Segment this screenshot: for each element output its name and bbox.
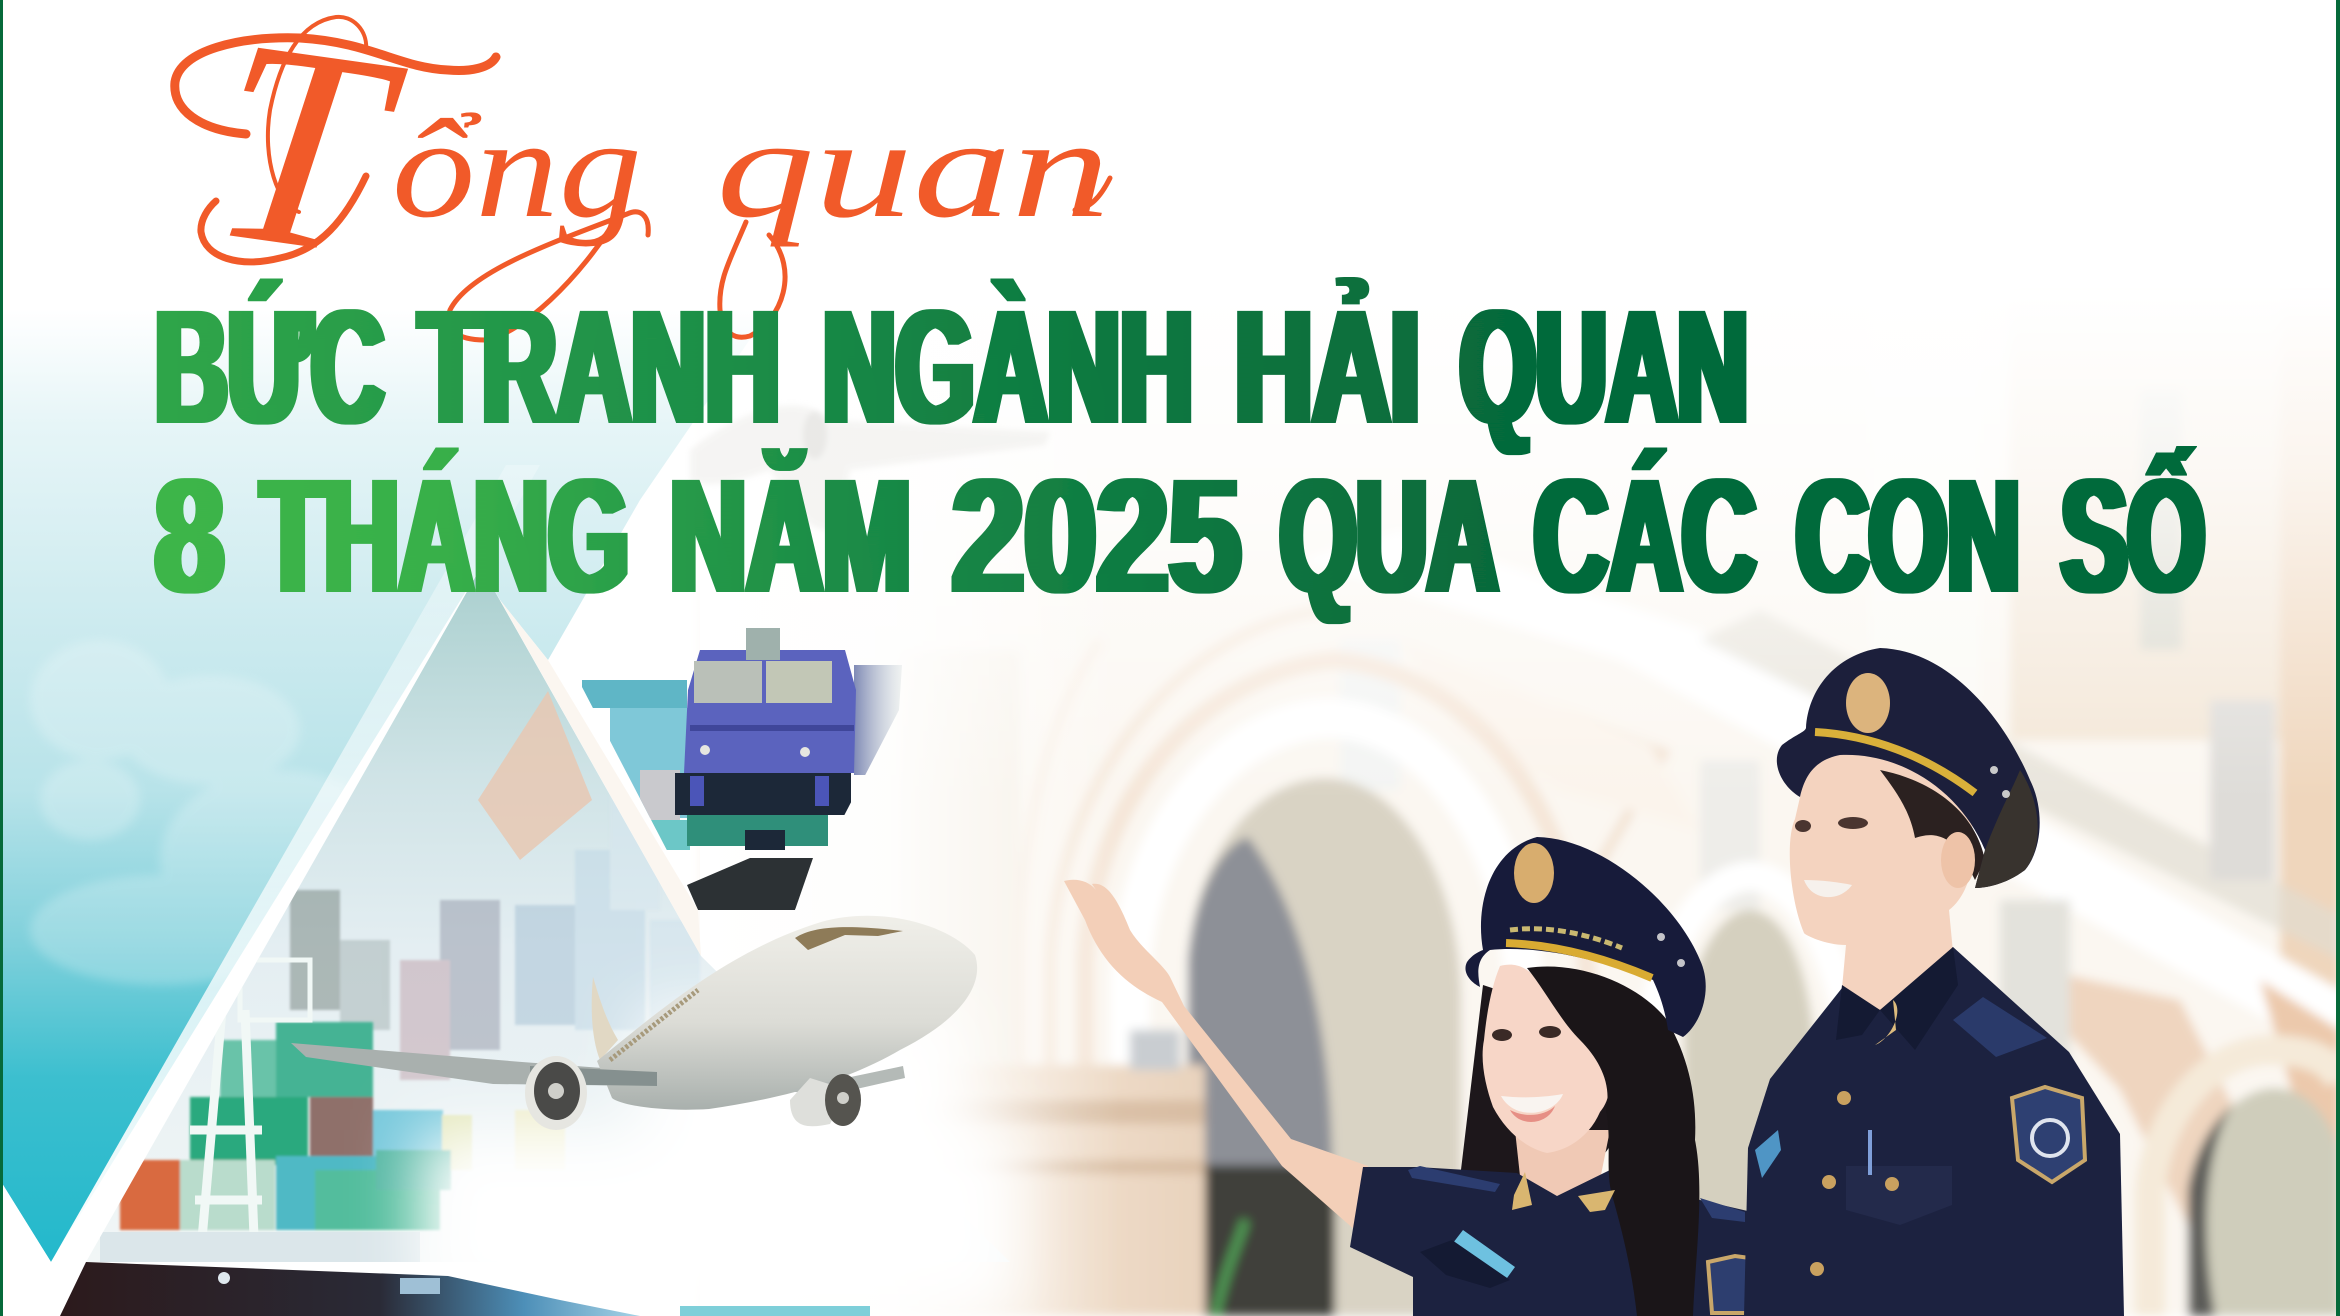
train triangle — [582, 628, 904, 910]
sleeve badge — [2012, 1087, 2085, 1182]
quay strip — [100, 1232, 420, 1264]
building background photo — [600, 290, 2340, 1316]
arch 1 moulding — [1130, 718, 1525, 1316]
shirt — [1350, 1167, 1752, 1316]
airplane — [291, 916, 977, 1130]
buttons — [1810, 1091, 1899, 1276]
neck — [1515, 1130, 1610, 1196]
locomotive side — [854, 665, 904, 775]
collar pins — [1512, 1172, 1532, 1210]
headline line 2: THÁNG — [261, 444, 629, 627]
headline line 2: CON — [1796, 444, 2020, 627]
headline line 2: NĂM — [670, 444, 911, 627]
front hair — [1527, 967, 1699, 1316]
face — [1483, 965, 1609, 1153]
ship hull — [60, 1262, 870, 1316]
script heading — [175, 0, 1110, 340]
headline line 2: SỐ — [2061, 444, 2205, 627]
headline line 2: QUA — [1280, 444, 1498, 627]
city skyline — [288, 850, 700, 1081]
headline line 1 — [155, 275, 1748, 458]
pillar — [880, 1065, 1205, 1316]
headline line 1: HẢI — [1235, 275, 1420, 458]
fog over lower middle — [420, 1010, 1020, 1316]
headline line 2: CÁC — [1534, 444, 1756, 627]
track — [687, 858, 813, 910]
name tag — [1453, 1230, 1515, 1278]
hair and ear — [1880, 770, 1985, 880]
neck and face — [1790, 745, 1974, 1010]
name tag — [1755, 1130, 1781, 1178]
heading text: ổng — [392, 89, 642, 247]
white band right of upright triangle — [500, 600, 701, 956]
eyes and smile — [1492, 1029, 1512, 1041]
customs officer: man — [1744, 648, 2124, 1316]
heading flourishes — [175, 17, 1110, 340]
headline line 1: QUAN — [1460, 275, 1748, 458]
bottom-left white corner — [0, 1180, 86, 1316]
headline line 2: 2025 — [952, 444, 1241, 627]
arch 3 — [2150, 1050, 2340, 1316]
upper building mouldings — [1434, 663, 1664, 880]
pocket flap — [1420, 1240, 1510, 1288]
locomotive body — [684, 650, 856, 773]
left engine — [525, 1056, 587, 1130]
peach triangle — [478, 691, 592, 860]
locomotive underframe — [675, 773, 851, 815]
headline line 2 — [155, 444, 2205, 627]
right engine — [790, 1078, 848, 1126]
headline line 1: NGÀNH — [823, 275, 1193, 458]
cap — [1465, 837, 1706, 1037]
shoulder strap — [1953, 997, 2047, 1057]
sky panel (left teal triangle) — [0, 310, 770, 1262]
cap — [1777, 648, 2040, 888]
epaulette — [1408, 1166, 1500, 1192]
bridge and containers — [582, 680, 687, 708]
raised arm — [1064, 880, 1380, 1252]
collar — [1836, 985, 1880, 1040]
customs officer: woman — [1064, 837, 1768, 1316]
headline line 1: BỨC — [155, 275, 384, 458]
pocket — [1846, 1166, 1952, 1225]
heading text: quan — [716, 89, 1110, 247]
container stacks — [120, 1022, 565, 1230]
shirt — [1744, 947, 2124, 1316]
clouds — [30, 640, 400, 985]
headline line 1: TRANH — [419, 275, 780, 458]
chest badge — [1708, 1256, 1768, 1313]
back hair — [1460, 985, 1680, 1185]
faint plane behind headline — [690, 406, 1050, 530]
left page border — [0, 0, 3, 1316]
headline line 2: 8 — [155, 444, 224, 627]
fog over building — [600, 290, 2340, 800]
collar pin — [1875, 1000, 1897, 1045]
quay crane — [190, 958, 312, 1232]
arch 1 opening — [1188, 778, 1461, 1316]
white band left of upright triangle — [51, 465, 540, 1262]
pen — [1868, 1130, 1872, 1175]
arch 2 — [1650, 876, 1855, 1316]
right page border — [2336, 0, 2340, 1316]
cab top — [746, 628, 780, 660]
port and city triangle — [86, 576, 716, 1262]
